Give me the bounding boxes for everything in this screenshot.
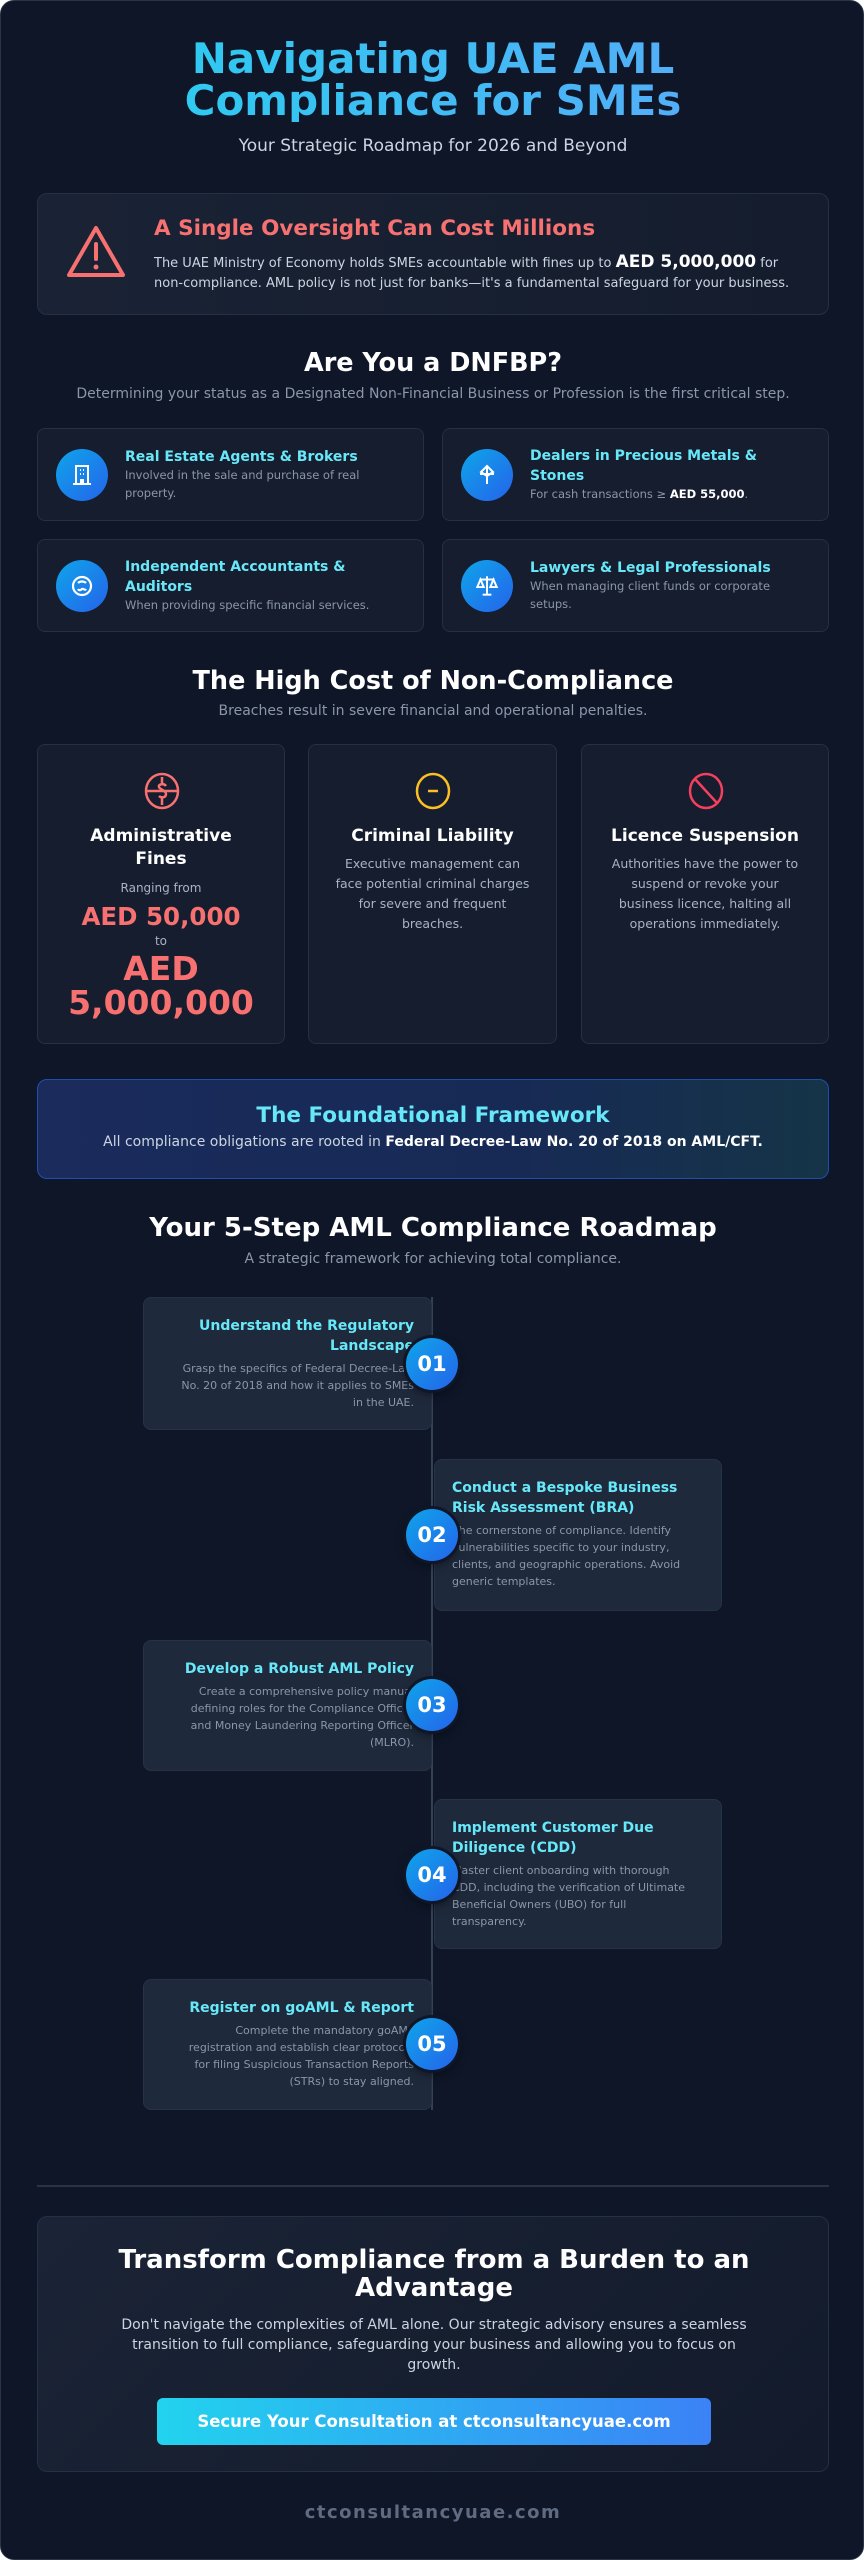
step 2: Risk Assessment (BRA): [452, 1500, 634, 1516]
step 2: generic templates.: [452, 1575, 556, 1588]
CTA text: Don't navigate the complexities of AML alone. Our strategic advisory ensures a seamless: [121, 2317, 747, 2333]
card: accountants: Independent Accountants &: [125, 559, 345, 575]
panel: administrative fines: Fines: [135, 849, 187, 869]
card: real estate: Involved in the sale and purchase of real: [125, 468, 359, 482]
panel: foundational framework: [37, 1079, 829, 1179]
icon: ledger: [56, 560, 108, 612]
title: Navigating UAE AML: [192, 34, 674, 83]
heading: high cost: The High Cost of Non-Compliance: [193, 666, 673, 696]
step 3: and Money Laundering Reporting Officer: [191, 1719, 414, 1732]
card: accountants: Auditors: [125, 579, 192, 595]
framework text: All compliance obligations are rooted in Federal Decree-Law No. 20 of 2018 on AML/CFT.: [103, 1134, 763, 1150]
card: accountants: When providing specific financial services.: [125, 598, 369, 612]
subheading: DNFBP: Determining your status as a Designated Non-Financial Business or Profession is the first critical step.: [76, 386, 790, 402]
step 1: Grasp the specifics of Federal Decree-Law: [183, 1362, 414, 1375]
heading: roadmap: Your 5-Step AML Compliance Roadmap: [149, 1213, 717, 1243]
heading: DNFBP: Are You a DNFBP?: [304, 348, 562, 378]
panel: administrative fines: Administrative: [90, 826, 232, 846]
timeline: [143, 1297, 722, 2110]
panel: criminal liability: breaches.: [402, 916, 463, 931]
panel: criminal liability: face potential criminal charges: [336, 876, 529, 891]
step 4: [434, 1799, 722, 1949]
step 4: Beneficial Owners (UBO) for full: [452, 1898, 626, 1911]
panel: criminal liability: Executive management can: [345, 856, 520, 871]
step 4: transparency.: [452, 1915, 527, 1928]
panel: administrative fines: AED 50,000: [81, 902, 241, 931]
icon: warning triangle: [67, 226, 126, 277]
icon: building: [56, 449, 108, 501]
panel: licence suspension: Licence Suspension: [611, 826, 799, 846]
panel: criminal liability: [308, 744, 557, 1044]
panel: licence suspension: suspend or revoke your: [631, 876, 779, 891]
panel: licence suspension: operations immediately.: [630, 916, 780, 931]
step 4: Diligence (CDD): [452, 1840, 576, 1856]
step 5: (STRs) to stay aligned.: [289, 2075, 414, 2088]
card: lawyers: When managing client funds or corporate: [530, 579, 770, 593]
step 1: Landscape: [330, 1338, 414, 1354]
step 2: The cornerstone of compliance. Identify: [452, 1524, 671, 1537]
panel: administrative fines: [37, 744, 285, 1044]
panel: licence suspension: Authorities have the power to: [612, 856, 798, 871]
badge 03: [406, 1679, 458, 1731]
step 2: clients, and geographic operations. Avoid: [452, 1558, 680, 1571]
step 5: [143, 1979, 432, 2110]
badge 05: 05: [417, 2032, 447, 2056]
card: lawyers: setups.: [530, 596, 572, 610]
alert heading: A Single Oversight Can Cost Millions: [154, 216, 595, 241]
step 5: Register on goAML & Report: [189, 2000, 414, 2016]
CTA button: [157, 2398, 711, 2445]
icon: scales: [461, 560, 513, 612]
card: precious metals: [442, 428, 829, 521]
step 3: defining roles for the Compliance Officer: [191, 1702, 414, 1715]
step 1: No. 20 of 2018 and how it applies to SMEs: [181, 1379, 414, 1392]
badge 02: 02: [417, 1523, 447, 1547]
panel: call to action: [37, 2216, 829, 2472]
step 1: Understand the Regulatory: [199, 1318, 414, 1334]
step 4: Master client onboarding with thorough: [452, 1864, 670, 1877]
panel: criminal liability: Criminal Liability: [351, 826, 514, 846]
card: lawyers: [442, 539, 829, 632]
panel: licence suspension: business licence, halting all: [619, 896, 791, 911]
panel: criminal liability: for severe and frequent: [359, 896, 506, 911]
subheading: roadmap: A strategic framework for achieving total compliance.: [244, 1251, 622, 1267]
card: precious metals: For cash transactions ≥ AED 55,000.: [530, 487, 748, 501]
step 3: Develop a Robust AML Policy: [185, 1661, 414, 1677]
badge 01: [406, 1338, 458, 1390]
CTA button: Secure Your Consultation at ctconsultancyuae.com: [197, 2412, 671, 2431]
card: real estate: property.: [125, 486, 176, 500]
footer: ctconsultancyuae.com: [305, 2502, 561, 2523]
icon: minus circle: [416, 772, 450, 810]
step 3: (MLRO).: [370, 1736, 414, 1749]
step 4: Implement Customer Due: [452, 1820, 654, 1836]
badge 01: 01: [417, 1352, 447, 1376]
card: precious metals: Dealers in Precious Metals &: [530, 448, 757, 464]
alert body: The UAE Ministry of Economy holds SMEs accountable with fines up to AED 5,000,000 for: [154, 252, 778, 272]
badge 04: [406, 1849, 458, 1901]
icon: gem: [461, 449, 513, 501]
subtitle: Your Strategic Roadmap for 2026 and Beyond: [239, 136, 627, 156]
alert body: [154, 252, 789, 291]
title: Compliance for SMEs: [185, 76, 681, 125]
card: lawyers: Lawyers & Legal Professionals: [530, 560, 771, 576]
badge 04: 04: [417, 1863, 447, 1887]
CTA text: growth.: [407, 2357, 461, 2373]
step 1: [143, 1297, 432, 1430]
alert body: non-compliance. AML policy is not just for banks—it's a fundamental safeguard for your business.: [154, 276, 789, 291]
step 5: Complete the mandatory goAML: [235, 2024, 414, 2037]
step 3: [143, 1640, 432, 1771]
badge 02: [406, 1509, 458, 1561]
step 3: Create a comprehensive policy manual: [199, 1685, 414, 1698]
step 2: [434, 1459, 722, 1611]
panel: administrative fines: 5,000,000: [68, 983, 254, 1022]
icon: ban: [688, 772, 724, 810]
step 2: Conduct a Bespoke Business: [452, 1480, 677, 1496]
panel: administrative fines: Ranging from: [121, 881, 201, 895]
subheading: high cost: Breaches result in severe financial and operational penalties.: [219, 703, 647, 719]
card: accountants: [37, 539, 424, 632]
panel: alert: [37, 193, 829, 315]
card: precious metals: Stones: [530, 468, 584, 484]
CTA heading: [118, 2245, 750, 2303]
step 2: vulnerabilities specific to your industry,: [452, 1541, 669, 1554]
CTA text: transition to full compliance, safeguarding your business and allowing you to focus on: [132, 2337, 736, 2353]
framework heading: The Foundational Framework: [256, 1103, 610, 1128]
card: real estate: [37, 428, 424, 521]
card: real estate: Real Estate Agents & Brokers: [125, 449, 358, 465]
panel: administrative fines: AED: [123, 949, 199, 988]
icon: money: [144, 772, 180, 810]
step 5: registration and establish clear protocols: [189, 2041, 414, 2054]
step 5: for filing Suspicious Transaction Reports: [194, 2058, 414, 2071]
CTA heading: Advantage: [355, 2273, 513, 2303]
CTA text: [121, 2317, 747, 2373]
panel: licence suspension: [581, 744, 829, 1044]
step 4: CDD, including the verification of Ultimate: [452, 1881, 685, 1894]
CTA heading: Transform Compliance from a Burden to an: [118, 2245, 750, 2275]
step 1: in the UAE.: [353, 1396, 414, 1409]
panel: administrative fines: to: [155, 934, 167, 948]
badge 03: 03: [417, 1693, 447, 1717]
badge 05: [406, 2018, 458, 2070]
title: [1, 38, 864, 122]
